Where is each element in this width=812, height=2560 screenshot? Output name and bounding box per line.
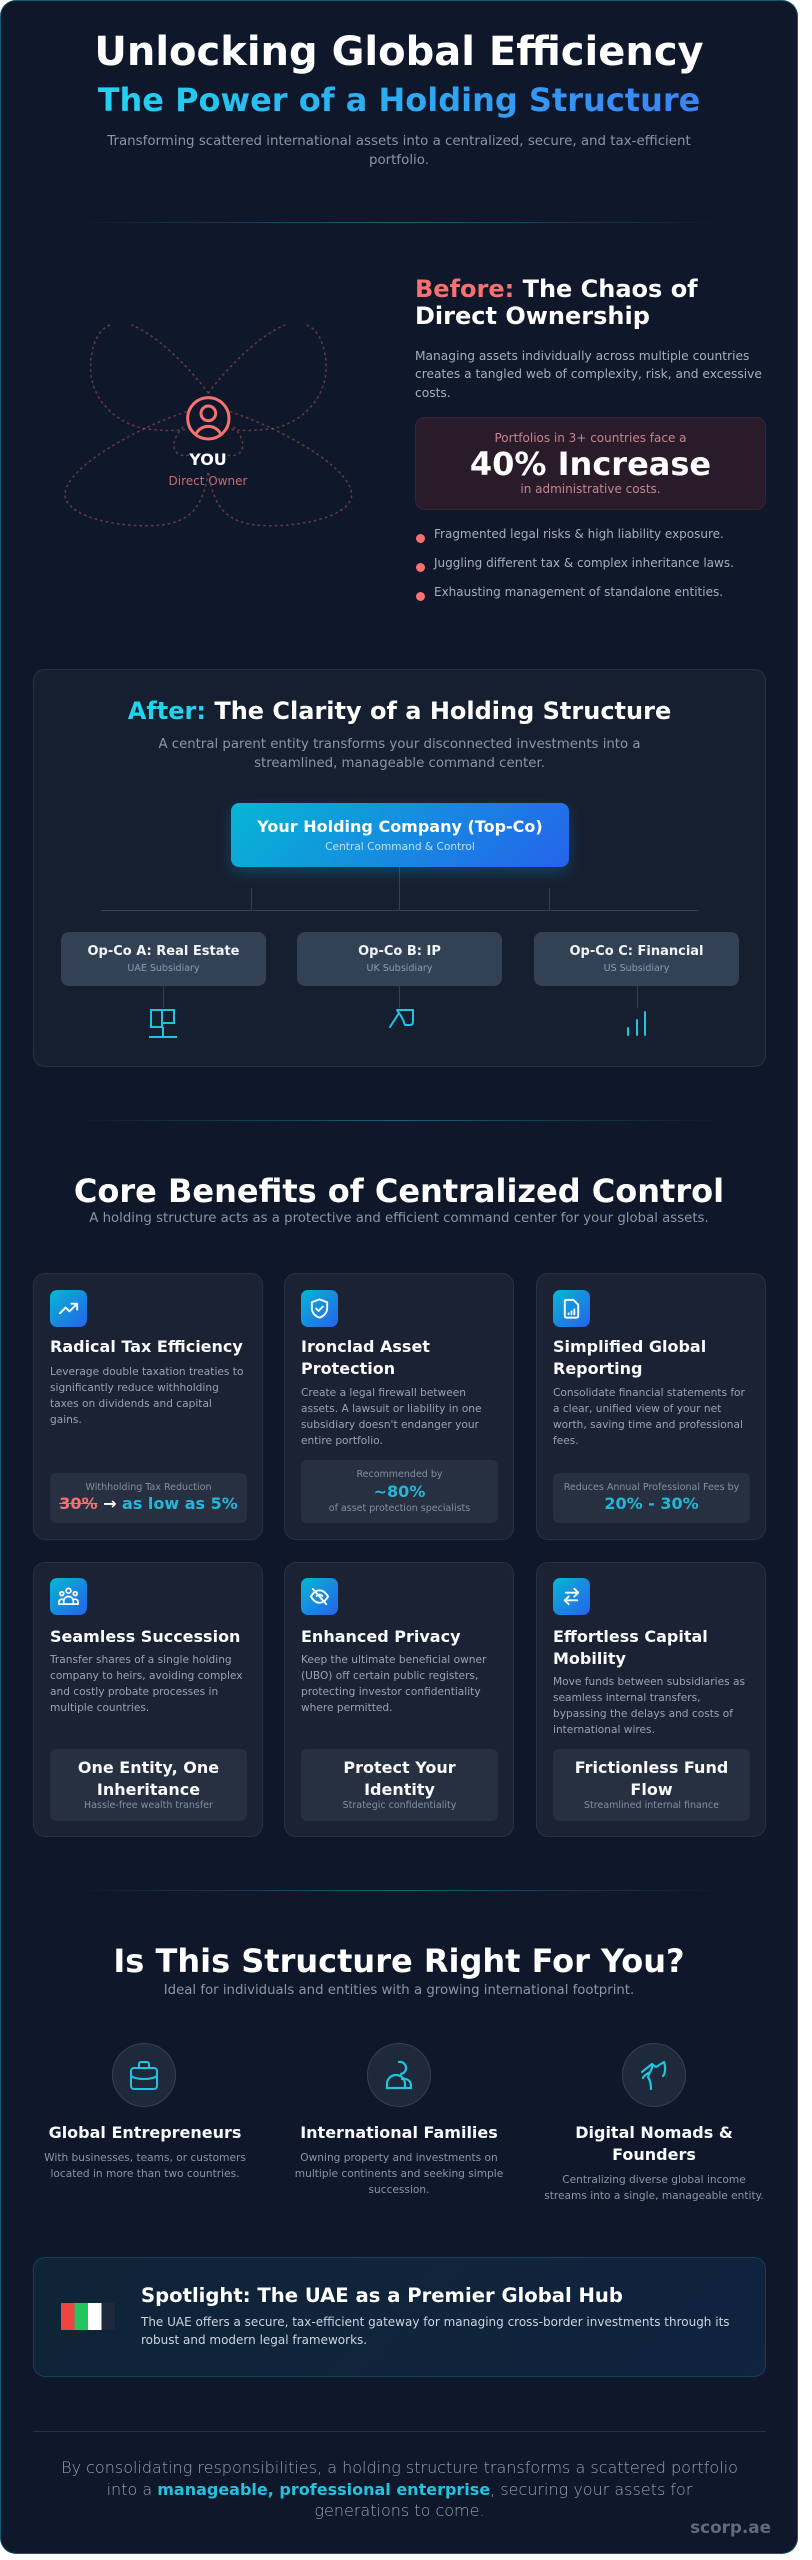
stat: 20% - 30% xyxy=(604,1494,699,1513)
after description xyxy=(158,737,641,771)
op-co B: UK Subsidiary xyxy=(367,963,432,974)
stat: One Entity, One xyxy=(78,1758,219,1777)
after description: A central parent entity transforms your disconnected investments into a xyxy=(158,737,641,752)
op-co A: UAE Subsidiary xyxy=(127,963,200,974)
icon: transfer arrows xyxy=(553,1578,590,1615)
stat: ~80% xyxy=(374,1482,425,1501)
panel: spotlight UAE xyxy=(33,2257,766,2377)
panel: radical tax efficiency: gains. xyxy=(50,1414,82,1426)
owner sublabel: Direct Owner xyxy=(169,474,247,488)
panel: seamless succession xyxy=(33,1562,263,1837)
before description: costs. xyxy=(415,386,451,400)
stat: 30% → as low as 5% xyxy=(59,1494,238,1513)
icon: shield xyxy=(301,1290,338,1327)
audience: families: succession. xyxy=(369,2184,429,2196)
audience: entrepreneurs xyxy=(44,2123,246,2180)
panel: ironclad asset protection: Ironclad Asset xyxy=(301,1337,430,1356)
stat: Hassle-free wealth transfer xyxy=(84,1800,213,1811)
title: Unlocking Global Efficiency xyxy=(94,29,704,75)
panel: simplified global reporting xyxy=(536,1273,766,1540)
brand watermark: scorp.ae xyxy=(690,2517,771,2537)
panel: ironclad asset protection xyxy=(284,1273,514,1540)
panel: ironclad asset protection: subsidiary doesn't endanger your xyxy=(301,1419,479,1431)
panel: effortless capital mobility: Move funds between subsidiaries as xyxy=(553,1676,745,1688)
panel: effortless capital mobility: seamless internal transfers, xyxy=(553,1692,700,1704)
panel: simplified global reporting: Reporting xyxy=(553,1358,642,1378)
panel: enhanced privacy: (UBO) off certain public registers, xyxy=(301,1670,478,1682)
org chart connectors xyxy=(101,867,698,1008)
op-co A: Op-Co A: Real Estate xyxy=(88,944,240,959)
panel: ironclad asset protection: Protection xyxy=(301,1358,395,1378)
after description: streamlined, manageable command center. xyxy=(254,756,545,771)
stat: Withholding Tax Reduction xyxy=(86,1482,211,1493)
tagline: portfolio. xyxy=(369,153,429,168)
panel: seamless succession: Transfer shares of a single holding xyxy=(50,1654,232,1666)
chaos diagram xyxy=(64,324,352,526)
top company box xyxy=(231,803,569,867)
stat xyxy=(301,1749,498,1821)
callout number: 40% Increase xyxy=(470,445,711,483)
panel: effortless capital mobility: bypassing the delays and costs of xyxy=(553,1708,733,1720)
audience: nomads: Founders xyxy=(612,2144,696,2164)
stat: Protect Your xyxy=(343,1758,456,1777)
dashed ownership petals xyxy=(65,325,352,526)
icon: pen xyxy=(389,1009,414,1028)
after heading: After: The Clarity of a Holding Structure xyxy=(128,697,671,725)
icon: person xyxy=(188,398,229,439)
stat xyxy=(301,1460,498,1523)
op-co B xyxy=(297,932,502,986)
panel: simplified global reporting: a clear, unified view of your net xyxy=(553,1403,721,1415)
icon: eye off xyxy=(301,1578,338,1615)
spotlight text xyxy=(140,2314,730,2347)
closing statement: into a manageable, professional enterprise, securing your assets for xyxy=(107,2480,692,2498)
panel: enhanced privacy: protecting investor confidentiality xyxy=(301,1686,481,1698)
panel: effortless capital mobility: Mobility xyxy=(553,1648,626,1668)
stat xyxy=(50,1473,247,1523)
stat: Reduces Annual Professional Fees by xyxy=(564,1482,739,1493)
bullet list: Fragmented legal risks & high liability exposure. xyxy=(434,527,724,541)
spotlight text: The UAE offers a secure, tax-efficient gateway for managing cross-border investments through its xyxy=(141,2314,730,2328)
core benefits subheading: A holding structure acts as a protective and efficient command center for your global assets. xyxy=(89,1211,709,1226)
bullet list: Exhausting management of standalone entities. xyxy=(434,585,723,599)
stat xyxy=(553,1749,750,1821)
callout: 40% increase xyxy=(415,417,766,510)
panel: effortless capital mobility xyxy=(536,1562,766,1837)
panel: radical tax efficiency xyxy=(33,1273,263,1540)
panel: simplified global reporting: fees. xyxy=(553,1435,579,1447)
audience: families: multiple continents and seeking simple xyxy=(295,2168,503,2180)
tagline: Transforming scattered international assets into a centralized, secure, and tax-efficient xyxy=(107,134,691,149)
top company sublabel: Central Command & Control xyxy=(325,841,475,853)
bullet list xyxy=(416,527,734,601)
panel: radical tax efficiency: taxes on dividends and capital xyxy=(50,1398,212,1410)
audience: entrepreneurs: With businesses, teams, or customers xyxy=(44,2152,246,2164)
before description: creates a tangled web of complexity, risk, and excessive xyxy=(415,367,762,381)
before heading: Before: The Chaos of xyxy=(415,275,698,303)
panel: radical tax efficiency: significantly reduce withholding xyxy=(50,1382,219,1394)
panel: simplified global reporting: worth, saving time and professional xyxy=(553,1419,743,1431)
callout label: Portfolios in 3+ countries face a xyxy=(494,431,686,445)
panel: enhanced privacy xyxy=(284,1562,514,1837)
icon: UAE flag xyxy=(61,2303,115,2330)
panel: simplified global reporting: Consolidate financial statements for xyxy=(553,1387,745,1399)
callout sublabel: in administrative costs. xyxy=(520,482,661,496)
panel: ironclad asset protection: Create a legal firewall between xyxy=(301,1387,466,1399)
panel: radical tax efficiency: Leverage double taxation treaties to xyxy=(50,1366,243,1378)
stat: Identity xyxy=(364,1780,435,1798)
audience heading: Is This Structure Right For You? xyxy=(113,1942,685,1980)
panel: enhanced privacy: Enhanced Privacy xyxy=(301,1627,460,1646)
op-co C xyxy=(534,932,739,986)
audience: families: Owning property and investments on xyxy=(300,2152,498,2164)
panel: ironclad asset protection: assets. A lawsuit or liability in one xyxy=(301,1403,482,1415)
op-co C: Op-Co C: Financial xyxy=(569,944,704,959)
panel: radical tax efficiency: Radical Tax Efficiency xyxy=(50,1337,243,1356)
stat: Recommended by xyxy=(356,1469,442,1480)
op-co B: Op-Co B: IP xyxy=(358,944,441,959)
panel: seamless succession: multiple countries. xyxy=(50,1702,149,1714)
panel: seamless succession: and costly probate processes in xyxy=(50,1686,218,1698)
icon: people xyxy=(50,1578,87,1615)
stat xyxy=(553,1473,750,1523)
icon: person xyxy=(367,2043,431,2107)
panel: seamless succession: company to heirs, avoiding complex xyxy=(50,1670,243,1682)
panel: effortless capital mobility: international wires. xyxy=(553,1724,655,1736)
panel: seamless succession: Seamless Succession xyxy=(50,1627,240,1646)
before heading xyxy=(415,275,698,330)
core benefits heading: Core Benefits of Centralized Control xyxy=(74,1172,724,1210)
closing statement: By consolidating responsibilities, a holding structure transforms a scattered portfolio xyxy=(61,2458,738,2477)
closing statement xyxy=(61,2458,738,2520)
panel: after xyxy=(33,669,766,1067)
audience: entrepreneurs: Global Entrepreneurs xyxy=(49,2123,241,2142)
before description: Managing assets individually across multiple countries xyxy=(415,348,749,362)
audience subheading: Ideal for individuals and entities with a growing international footprint. xyxy=(164,1983,634,1998)
owner label: YOU xyxy=(189,450,227,469)
stat: Strategic confidentiality xyxy=(343,1800,456,1811)
audience: nomads: Centralizing diverse global income xyxy=(562,2174,746,2186)
stat: Streamlined internal finance xyxy=(584,1800,719,1811)
before heading: Direct Ownership xyxy=(415,302,650,330)
stat: Frictionless Fund xyxy=(575,1758,728,1777)
icon: trend xyxy=(50,1290,87,1327)
op-co A xyxy=(61,932,266,986)
icon: bars xyxy=(627,1011,646,1036)
stat: Flow xyxy=(630,1780,673,1798)
stat: of asset protection specialists xyxy=(329,1503,470,1514)
panel: simplified global reporting: Simplified Global xyxy=(553,1337,706,1356)
spotlight heading: Spotlight: The UAE as a Premier Global Hub xyxy=(141,2284,623,2307)
spotlight text: robust and modern legal frameworks. xyxy=(141,2333,367,2347)
icon: document xyxy=(553,1290,590,1327)
icon: building xyxy=(149,1009,177,1038)
subtitle: The Power of a Holding Structure xyxy=(98,81,700,119)
icon: briefcase xyxy=(112,2043,176,2107)
before description xyxy=(415,348,762,400)
top company name: Your Holding Company (Top-Co) xyxy=(257,817,543,836)
closing statement: generations to come. xyxy=(314,2501,485,2520)
tagline xyxy=(107,134,691,168)
panel: enhanced privacy: where permitted. xyxy=(301,1702,392,1714)
stat xyxy=(50,1749,247,1821)
op-co C: US Subsidiary xyxy=(604,963,669,974)
panel: enhanced privacy: Keep the ultimate beneficial owner xyxy=(301,1654,486,1666)
icon: nomad branches xyxy=(622,2043,686,2107)
panel: effortless capital mobility: Effortless Capital xyxy=(553,1627,708,1646)
bullet list: Juggling different tax & complex inheritance laws. xyxy=(434,556,734,570)
audience: families xyxy=(295,2123,503,2196)
audience: nomads xyxy=(544,2123,764,2202)
audience: families: International Families xyxy=(300,2123,498,2142)
audience: nomads: streams into a single, manageable entity. xyxy=(544,2190,764,2202)
audience: entrepreneurs: located in more than two countries. xyxy=(50,2168,240,2180)
stat: Inheritance xyxy=(97,1780,200,1798)
audience: nomads: Digital Nomads & xyxy=(575,2123,733,2142)
panel: ironclad asset protection: entire portfolio. xyxy=(301,1435,383,1447)
